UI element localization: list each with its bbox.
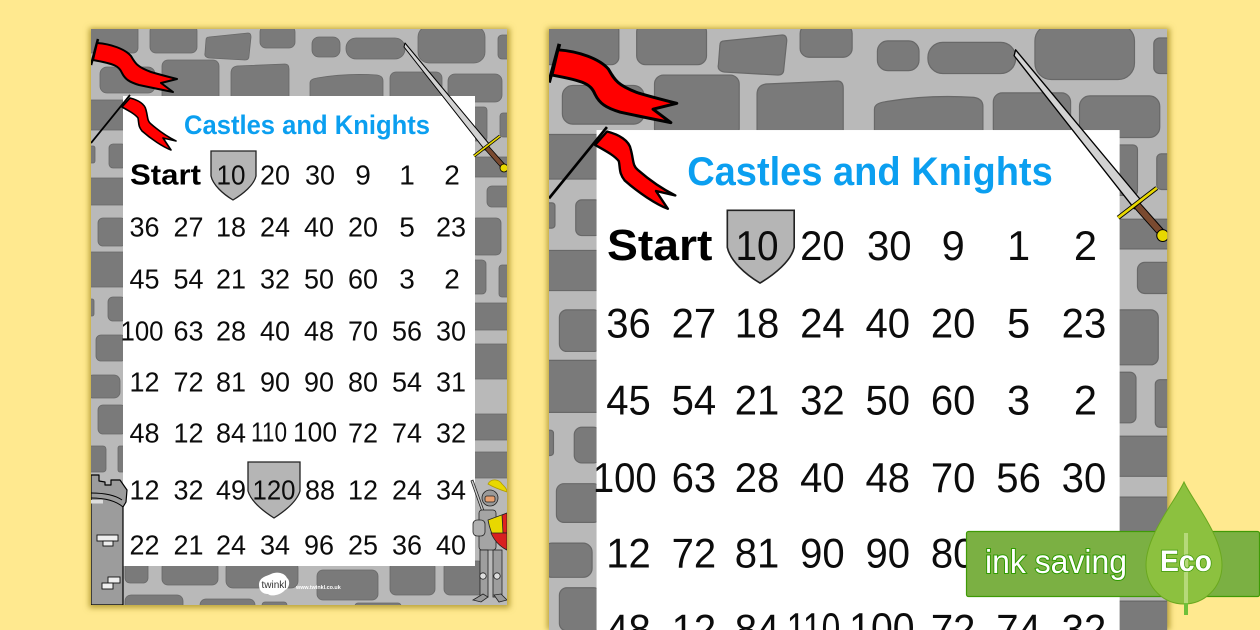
number grid: 56 bbox=[996, 454, 1041, 501]
icon: knight with shield bbox=[471, 480, 507, 602]
number grid: 34 bbox=[436, 474, 466, 506]
number grid: 74 bbox=[392, 418, 422, 448]
icon: lower red flag bbox=[549, 127, 675, 209]
poster content bbox=[87, 25, 512, 611]
number grid: 63 bbox=[672, 454, 716, 501]
number grid: 21 bbox=[216, 264, 246, 294]
panel: large poster close-up bbox=[543, 23, 1175, 630]
number grid: 20 bbox=[800, 222, 845, 269]
stone wall background bbox=[543, 23, 1175, 630]
number grid: 120 bbox=[252, 474, 296, 506]
number grid: 40 bbox=[260, 316, 290, 346]
white number board bbox=[597, 130, 1120, 630]
number grid: 18 bbox=[216, 212, 246, 242]
number grid: 12 bbox=[348, 474, 378, 506]
number grid: 70 bbox=[348, 316, 378, 346]
icon: castle tower bbox=[91, 475, 127, 605]
number grid: 45 bbox=[130, 264, 160, 294]
number grid: 9 bbox=[355, 160, 371, 190]
poster content bbox=[543, 23, 1175, 630]
number grid: 25 bbox=[348, 530, 378, 560]
number grid: 24 bbox=[216, 530, 246, 560]
logo: twinkl: twinkl bbox=[261, 580, 287, 591]
icon: green leaf drop bbox=[1146, 482, 1222, 615]
number grid: 32 bbox=[800, 377, 845, 424]
number grid: 56 bbox=[392, 316, 422, 346]
number grid: 21 bbox=[174, 530, 204, 560]
number grid: 45 bbox=[606, 377, 651, 424]
number grid: 50 bbox=[304, 264, 334, 294]
number grid: 72 bbox=[672, 530, 716, 577]
banner text: ink saving bbox=[985, 543, 1127, 580]
number grid: 32 bbox=[174, 474, 204, 506]
number grid: 40 bbox=[800, 454, 845, 501]
number grid: 32 bbox=[436, 418, 466, 448]
green banner bbox=[966, 532, 1260, 596]
number grid: 1 bbox=[1007, 222, 1030, 269]
panel shadow bbox=[89, 28, 510, 608]
badge: ink saving eco bbox=[966, 482, 1260, 615]
number grid: 80 bbox=[348, 366, 378, 398]
number grid: 40 bbox=[436, 530, 466, 560]
number grid: 88 bbox=[305, 474, 335, 506]
number grid: 90 bbox=[304, 366, 334, 398]
number grid: 31 bbox=[1062, 530, 1106, 577]
number grid: 81 bbox=[735, 530, 779, 577]
number grid: 49 bbox=[216, 474, 246, 506]
number grid: 100 bbox=[593, 454, 657, 501]
number grid: 22 bbox=[130, 530, 160, 560]
number grid: 34 bbox=[260, 530, 290, 560]
number grid: 48 bbox=[304, 316, 334, 346]
number grid: 24 bbox=[392, 474, 422, 506]
number grid: 5 bbox=[1007, 299, 1030, 346]
number grid: 2 bbox=[1074, 377, 1097, 424]
number grid: 72 bbox=[348, 418, 378, 448]
number grid: 50 bbox=[866, 377, 910, 424]
number grid: 12 bbox=[130, 366, 160, 398]
number grid: 9 bbox=[942, 222, 965, 269]
start label: Start bbox=[607, 222, 712, 270]
number grid: 54 bbox=[392, 366, 422, 398]
stone wall background bbox=[87, 25, 512, 611]
number grid: 90 bbox=[866, 530, 910, 577]
number grid: 54 bbox=[672, 377, 716, 424]
number grid: 90 bbox=[800, 530, 845, 577]
number grid: 20 bbox=[348, 212, 378, 242]
number grid: 81 bbox=[216, 366, 246, 398]
panel shadow bbox=[547, 28, 1170, 630]
icon: upper red flag bbox=[549, 44, 677, 123]
number grid: 20 bbox=[931, 299, 975, 346]
number grid: 27 bbox=[672, 299, 716, 346]
number grid: 63 bbox=[174, 316, 204, 346]
number grid: 2 bbox=[1074, 222, 1097, 269]
number grid: 60 bbox=[931, 377, 975, 424]
shield: 120 bbox=[248, 462, 300, 518]
start label: Start bbox=[130, 160, 201, 192]
number grid: 84 bbox=[216, 418, 246, 448]
number grid: 2 bbox=[444, 264, 460, 294]
logo: twinkl bbox=[259, 573, 341, 595]
number grid: 12 bbox=[130, 474, 160, 506]
number grid: 70 bbox=[931, 454, 975, 501]
number grid: 31 bbox=[436, 366, 466, 398]
number grid: 2 bbox=[444, 160, 460, 190]
number grid: 100 bbox=[293, 416, 337, 448]
title: Castles and Knights bbox=[184, 110, 430, 140]
eco label: Eco bbox=[1160, 545, 1212, 578]
number grid: 40 bbox=[304, 212, 334, 242]
number grid: 12 bbox=[606, 530, 651, 577]
number grid: 100 bbox=[120, 316, 164, 346]
number grid: 10 bbox=[216, 160, 246, 190]
number grid: 72 bbox=[174, 366, 204, 398]
number grid: 36 bbox=[130, 212, 160, 242]
number grid: 3 bbox=[399, 264, 415, 294]
number grid: 5 bbox=[399, 212, 415, 242]
number grid: 90 bbox=[260, 366, 290, 398]
number grid: 30 bbox=[436, 316, 466, 346]
title: Castles and Knights bbox=[687, 149, 1053, 194]
number grid: 54 bbox=[996, 530, 1041, 577]
number grid: 80 bbox=[931, 530, 975, 577]
number grid: 28 bbox=[735, 454, 779, 501]
icon: sword bbox=[404, 43, 508, 172]
number grid: 27 bbox=[174, 212, 204, 242]
number grid: 3 bbox=[1007, 377, 1030, 424]
number grid: 21 bbox=[735, 377, 779, 424]
logo: twinkl: www.twinkl.co.uk bbox=[295, 585, 341, 591]
shield: 10 bbox=[727, 210, 794, 283]
number grid: 1 bbox=[399, 160, 415, 190]
number grid: 30 bbox=[867, 222, 912, 269]
number grid: 10 bbox=[735, 222, 779, 269]
number grid bbox=[593, 222, 1106, 630]
number grid: 24 bbox=[260, 212, 290, 242]
icon: lower red flag bbox=[91, 95, 176, 150]
number grid: 48 bbox=[866, 454, 910, 501]
number grid: 24 bbox=[800, 299, 845, 346]
number grid: 40 bbox=[866, 299, 910, 346]
number grid: 20 bbox=[260, 160, 290, 190]
number grid: 30 bbox=[305, 160, 335, 190]
number grid: 36 bbox=[606, 299, 651, 346]
panel: small poster preview bbox=[87, 25, 512, 611]
white number board bbox=[123, 96, 475, 566]
number grid bbox=[120, 160, 466, 560]
number grid: 54 bbox=[174, 264, 204, 294]
number grid: 36 bbox=[392, 530, 422, 560]
number grid: 18 bbox=[735, 299, 779, 346]
number grid: 30 bbox=[1062, 454, 1106, 501]
number grid: 12 bbox=[174, 418, 204, 448]
number grid: 32 bbox=[260, 264, 290, 294]
number grid: 96 bbox=[304, 530, 334, 560]
number grid: 60 bbox=[348, 264, 378, 294]
number grid: 23 bbox=[1062, 299, 1106, 346]
icon: sword bbox=[1014, 50, 1169, 241]
number grid: 28 bbox=[216, 316, 246, 346]
number grid: 23 bbox=[436, 212, 466, 242]
number grid: 48 bbox=[130, 418, 160, 448]
number grid: 110 bbox=[251, 416, 287, 448]
icon: upper red flag bbox=[91, 39, 177, 92]
shield: 10 bbox=[211, 151, 256, 200]
